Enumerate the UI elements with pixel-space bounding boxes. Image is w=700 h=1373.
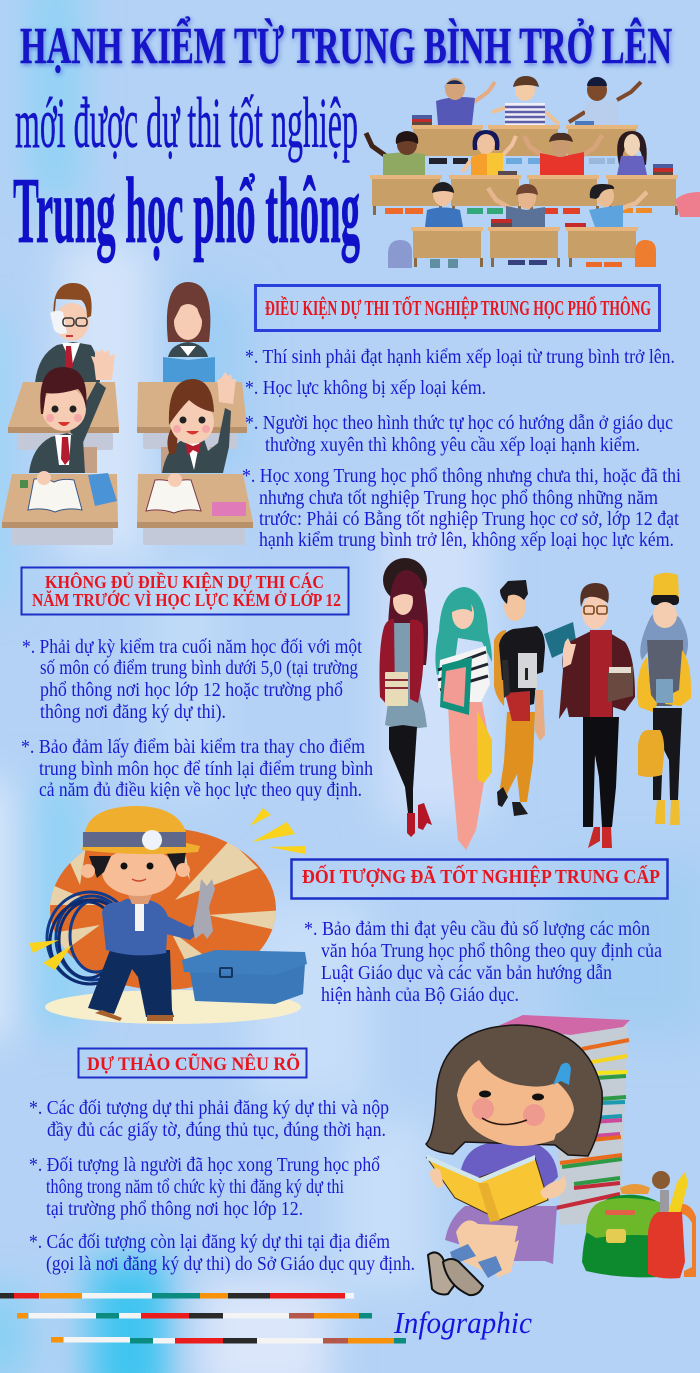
text block: draft: *. Các đối tượng dự thi phải đăng ký dự thi và nộp <box>29 1097 389 1119</box>
text block: not eligible: cả năm đủ điều kiện về học lực theo quy định. <box>39 779 362 801</box>
text block: conditions <box>242 346 681 551</box>
student 2 <box>435 587 492 850</box>
heading box: intermediate graduates: ĐỐI TƯỢNG ĐÃ TỐT NGHIỆP TRUNG CẤP <box>302 864 660 888</box>
text block: intermediate graduates: Luật Giáo dục và các văn bản hướng dẫn <box>321 962 612 984</box>
text block: conditions: thường xuyên thì không yêu cầu xếp loại hạnh kiểm. <box>265 434 640 456</box>
text block: draft <box>29 1097 415 1275</box>
text block: not eligible: *. Phải dự kỳ kiểm tra cuối năm học đối với một <box>22 636 362 658</box>
text block: draft: tại trường phổ thông nơi học lớp 12. <box>46 1198 303 1220</box>
student 4 <box>544 583 635 848</box>
cable coil <box>47 892 133 984</box>
backpacks and pencils <box>582 1171 696 1278</box>
front row desks <box>411 219 638 268</box>
text block: not eligible: trung bình môn học để tính lại điểm trung bình <box>39 758 373 780</box>
text block: not eligible <box>21 636 373 801</box>
text block: intermediate graduates <box>304 918 662 1006</box>
heading box: not eligible: KHÔNG ĐỦ ĐIỀU KIỆN DỰ THI CÁC <box>45 572 324 592</box>
illustration: girl reading with books <box>426 1015 696 1295</box>
worker figure <box>81 806 215 1021</box>
heading box: intermediate graduates <box>292 860 668 898</box>
text block: intermediate graduates: *. Bảo đảm thi đạt yêu cầu đủ số lượng các môn <box>304 918 650 940</box>
yellow spikes right <box>250 808 305 854</box>
text block: draft: (gọi là nơi đăng ký dự thi) do Sở Giáo dục quy định. <box>46 1253 415 1275</box>
student raising hand right <box>161 372 236 473</box>
text block: conditions: *. Học lực không bị xếp loại kém. <box>245 377 486 399</box>
front row students <box>425 182 647 227</box>
heading box: not eligible <box>22 568 348 614</box>
heading box: not eligible: NĂM TRƯỚC VÌ HỌC LỰC KÉM Ở LỚP 12 <box>32 590 341 610</box>
ground shadow <box>45 990 301 1024</box>
illustration: group of students <box>380 558 691 850</box>
stripe 1 <box>0 1293 354 1298</box>
text block: draft: *. Đối tượng là người đã học xong Trung học phổ <box>29 1154 380 1176</box>
back row desks and books <box>411 115 638 156</box>
back row students <box>436 76 641 125</box>
heading box: conditions <box>256 286 660 330</box>
text block: intermediate graduates: hiện hành của Bộ Giáo dục. <box>321 984 519 1006</box>
student 3 <box>494 580 545 816</box>
middle row students <box>366 130 647 175</box>
illustration: students at desks <box>2 282 253 545</box>
text block: draft: thông trong năm tổ chức kỳ thi đăng ký dự thi <box>46 1176 344 1198</box>
student raising hand left <box>29 349 115 473</box>
orange sunburst <box>50 830 276 990</box>
text block: intermediate graduates: văn hóa Trung học phổ thông theo quy định của <box>321 940 662 962</box>
text block: not eligible: thông nơi đăng ký dự thi). <box>40 701 226 723</box>
back row shoes <box>429 158 615 164</box>
text block: draft: đầy đủ các giấy tờ, đúng thủ tục, đúng thời hạn. <box>47 1119 386 1141</box>
back right desk <box>137 382 247 449</box>
text block: not eligible: số môn có điểm trung bình dưới 5,0 (tại trường <box>40 657 358 679</box>
text block: draft: *. Các đối tượng còn lại đăng ký dự thi tại địa điểm <box>29 1231 390 1253</box>
stripe 3 <box>51 1337 406 1344</box>
back left desk <box>8 382 119 450</box>
open yellow book <box>427 1155 566 1222</box>
illustration: worker <box>29 806 307 1024</box>
student 5 <box>637 573 691 825</box>
heading box: draft: DỰ THẢO CŨNG NÊU RÕ <box>87 1053 300 1075</box>
student 1 <box>380 558 432 837</box>
caption: Infographic: Infographic <box>393 1305 532 1340</box>
toolbox <box>182 950 307 1004</box>
bags <box>388 192 700 268</box>
heading box: draft <box>78 1048 306 1078</box>
text block: conditions: nhưng chưa tốt nghiệp Trung học phổ thông những năm <box>259 487 658 509</box>
front left desk <box>2 471 118 545</box>
stripe 2 <box>17 1313 372 1318</box>
front right desk <box>137 473 253 545</box>
text block: not eligible: phổ thông nơi học lớp 12 hoặc trường phổ <box>40 679 343 701</box>
illustration: classroom <box>366 76 700 268</box>
yellow spikes left <box>29 940 72 970</box>
text block: not eligible: *. Bảo đảm lấy điểm bài kiểm tra thay cho điểm <box>21 736 365 758</box>
middle row desks <box>370 164 678 215</box>
stack of books <box>500 1015 630 1225</box>
decorative stripes <box>0 1293 406 1344</box>
student with blue book <box>163 282 215 397</box>
girl body <box>428 1143 558 1295</box>
middle row shoes <box>385 208 652 214</box>
student with paper on face <box>35 283 100 383</box>
girl hair and face <box>426 1025 602 1156</box>
